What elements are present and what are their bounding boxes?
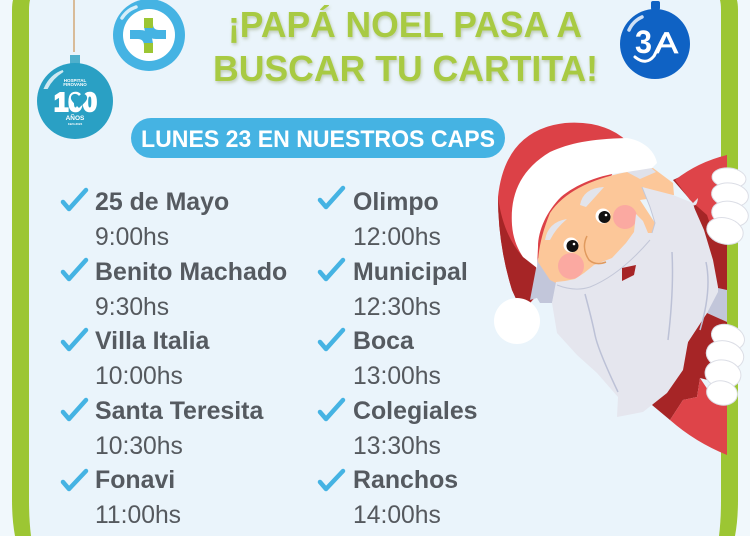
item: Santa Teresita: 10:30hs bbox=[95, 433, 183, 460]
ornament: Hospital Fiorito 100 años bbox=[37, 0, 113, 139]
item: Municipal: Municipal bbox=[353, 258, 468, 286]
cheeks bbox=[558, 205, 637, 279]
item: Boca: 13:00hs bbox=[353, 363, 441, 390]
upper glove bbox=[704, 166, 750, 248]
ornament: Hospital Fiorito 100 años: FIROVANO bbox=[63, 82, 87, 87]
item: Olimpo bbox=[320, 188, 441, 251]
title bbox=[213, 4, 598, 89]
item: Olimpo: 12:00hs bbox=[353, 224, 441, 251]
item: Colegiales bbox=[320, 397, 478, 460]
ornament: Hospital Fiorito 100 años: AÑOS bbox=[66, 113, 85, 122]
date pill: LUNES 23 EN NUESTROS CAPS bbox=[141, 126, 495, 153]
schedule column 2 bbox=[320, 188, 478, 529]
item: 25 de Mayo: 25 de Mayo bbox=[95, 188, 229, 216]
item: Fonavi: 11:00hs bbox=[95, 502, 181, 529]
item: Villa Italia: Villa Italia bbox=[95, 327, 210, 355]
item: Fonavi: Fonavi bbox=[95, 466, 175, 494]
ornament: 3A logo: 3 bbox=[635, 24, 652, 60]
ornament: Hospital Fiorito 100 años: HOSPITAL bbox=[64, 78, 86, 83]
body bbox=[652, 155, 727, 455]
ornament: Hospital Fiorito 100 años: 1924-2024 bbox=[68, 122, 82, 126]
item: 25 de Mayo bbox=[63, 188, 229, 251]
item: Villa Italia bbox=[63, 327, 210, 390]
pompom bbox=[494, 298, 540, 344]
item: Municipal bbox=[320, 258, 468, 321]
face bbox=[538, 168, 674, 290]
item: Benito Machado: Benito Machado bbox=[95, 258, 287, 286]
title: ¡PAPÁ NOEL PASA A bbox=[228, 4, 582, 45]
eyebrows bbox=[545, 187, 604, 240]
item: Municipal: 12:30hs bbox=[353, 294, 441, 321]
item: Benito Machado: 9:30hs bbox=[95, 294, 169, 321]
item: 25 de Mayo: 9:00hs bbox=[95, 224, 169, 251]
sideburn bbox=[530, 258, 557, 303]
Santa Claus peeking bbox=[494, 123, 750, 455]
item: Olimpo: Olimpo bbox=[353, 188, 439, 216]
item: Colegiales: Colegiales bbox=[353, 397, 478, 425]
item: Colegiales: 13:30hs bbox=[353, 433, 441, 460]
item: Santa Teresita: Santa Teresita bbox=[95, 397, 263, 425]
ornament: 3A logo bbox=[620, 1, 690, 79]
title: BUSCAR TU CARTITA! bbox=[213, 48, 598, 89]
item: Boca bbox=[320, 327, 441, 390]
item: Fonavi bbox=[63, 466, 181, 529]
item: Villa Italia: 10:00hs bbox=[95, 363, 183, 390]
item: Santa Teresita bbox=[63, 397, 263, 460]
eyes bbox=[564, 208, 610, 252]
ornament: hospital logo bbox=[113, 0, 185, 71]
item: Ranchos bbox=[320, 466, 458, 529]
item: Ranchos: Ranchos bbox=[353, 466, 458, 494]
item: Benito Machado bbox=[63, 258, 287, 321]
hat bbox=[498, 123, 628, 312]
nose bbox=[584, 236, 606, 264]
date pill bbox=[131, 118, 505, 158]
ornament: Hospital Fiorito 100 años: 100 bbox=[54, 87, 97, 117]
item: Boca: Boca bbox=[353, 327, 414, 355]
item: Ranchos: 14:00hs bbox=[353, 502, 441, 529]
beard bbox=[552, 167, 718, 417]
ornament: 3A logo: A bbox=[655, 27, 678, 60]
schedule column 1 bbox=[63, 188, 287, 529]
hat trim bbox=[512, 138, 657, 268]
lower glove bbox=[703, 320, 748, 408]
